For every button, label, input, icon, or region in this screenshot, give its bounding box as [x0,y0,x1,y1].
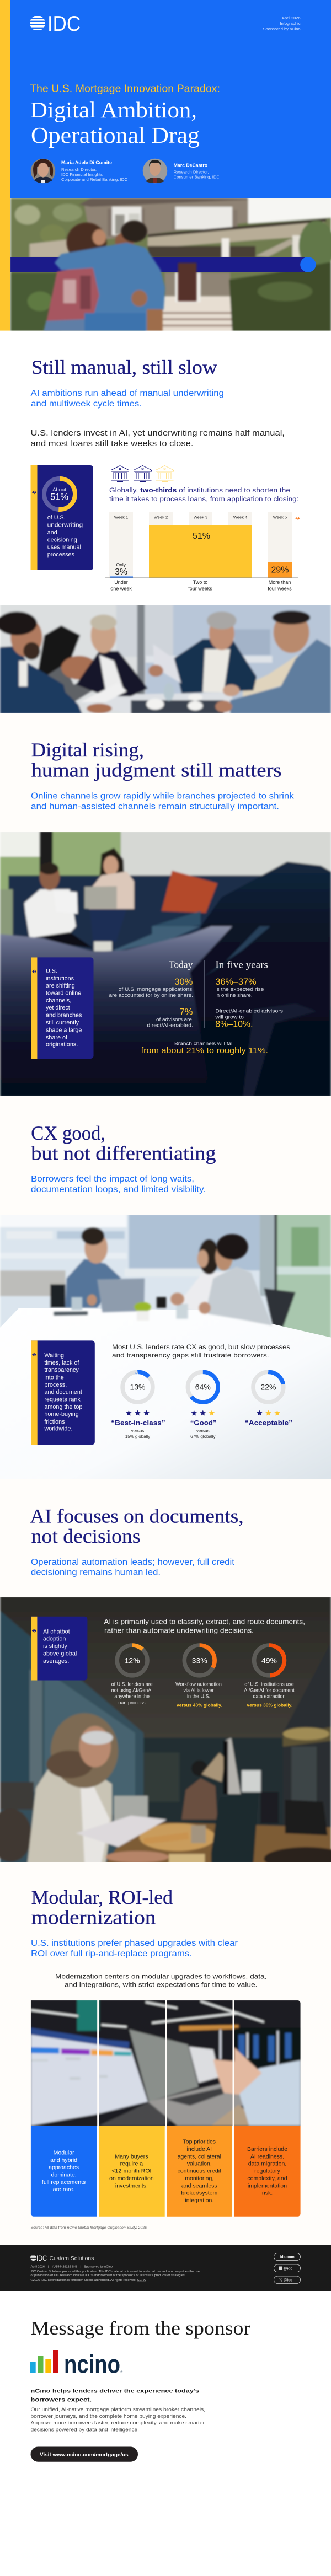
rating: best-in-class: “Best-in-class” [111,1419,166,1427]
legal text: Sponsored by nCino [84,2265,113,2268]
callout text: still currently [46,1019,79,1026]
intro text: and integrations, with strict expectations for time to value. [65,1981,257,1989]
AI use panel [104,1618,305,1708]
card: top priorities: agents, collateral [178,2154,221,2160]
chart: time to close: one week [110,586,132,592]
callout text: and branches [46,1012,82,1018]
icon: arrow [32,491,36,494]
subheading [31,1939,238,1958]
subheading: decisioning remains human led. [31,1568,161,1577]
section: still manual, still slow [31,356,299,592]
callout text: transparency [44,1367,79,1373]
legal text: ©2026 IDC. Reproduction is forbidden unless authorized. All rights reserved. CCPA [31,2278,146,2282]
card: top priorities: integration. [185,2197,213,2204]
column: in five years: Direct/AI-enabled advisors [215,1008,284,1013]
card: barriers: data migration, [248,2161,286,2167]
chart: time to close: Only [116,562,126,567]
card: ROI requirement: require a [120,2161,143,2167]
branch channels note: Branch channels will fall [174,1040,234,1046]
sponsor paragraph: decisions powered by data and intelligence. [31,2427,139,2433]
title: Digital Ambition, [30,97,197,122]
author: Marc DeCastro: Consumer Banking, IDC [174,175,220,180]
rating: acceptable: 22% [260,1383,276,1392]
intro text: AI is primarily used to classify, extract, and route documents, [104,1618,305,1625]
stat: 12%: of U.S. lenders are [111,1682,153,1687]
rating: best-in-class: 15% globally [125,1434,150,1439]
chart: time to close: Week 4 [233,515,247,520]
card: barriers: complexity, and [247,2175,287,2182]
stat: 49% [244,1645,295,1708]
callout text: decisioning [47,537,77,544]
chart: time to close: Under [114,579,128,585]
intro text: Most U.S. lenders rate CX as good, but slow processes [112,1343,290,1351]
stat: 33%: Workflow automation [175,1682,222,1687]
heading: Still manual, still slow [31,356,217,378]
card: barriers: implementation [248,2182,287,2189]
legal text [31,2265,200,2282]
column: in five years [215,959,284,1029]
stat: 33%: via AI is lower [183,1688,214,1693]
callout: waiting times [31,1340,95,1445]
chart intro: Globally, two-thirds of institutions need to shorten the [109,486,290,494]
band end dot [300,257,316,272]
donut: about 51%: 51% [50,492,68,502]
card: barriers: AI readiness, [250,2154,284,2160]
heading [30,1505,244,1547]
chart: time to close: Week 3 [194,515,207,520]
donut: about 51%: About [52,487,66,493]
card: ROI requirement: investments. [115,2182,148,2189]
author: Maria Adele Di Comite: IDC Financial Insights [61,172,103,177]
callout text: underwriting [47,522,83,529]
heading: human judgment still matters [31,759,281,781]
section heading: digital rising [31,739,294,812]
legal text: or publication of IDC research indicate IDC's endorsement of the sponsor's or licensee's products or strategies. [31,2274,185,2277]
subheading: AI ambitions run ahead of manual underwriting [31,389,224,398]
card: barriers: risk. [262,2189,273,2196]
stat: 12% [111,1645,153,1705]
rating: acceptable [245,1372,292,1427]
column: in five years: In five years [215,959,268,970]
column: today: Today [169,959,193,970]
sponsor paragraph [31,2407,205,2433]
intro text: and most loans still take weeks to close. [31,439,193,448]
intro text: and transparency gaps still frustrate borrowers. [112,1351,269,1359]
column: in five years: is the expected rise [215,986,264,992]
chart: time to close: More than [269,579,291,585]
callout text [44,1352,82,1432]
section heading: AI focuses on documents [30,1505,244,1577]
photo: meeting [0,604,331,714]
subheading [31,1558,235,1577]
subheading [31,389,224,409]
callout text: and [47,529,57,536]
intro text: rather than automate underwriting decisions. [104,1627,254,1634]
photo: woman working at night [0,1596,331,1871]
card: barriers [234,2126,301,2217]
stat: 49%: AI/GenAI for document [244,1688,295,1693]
callout: chatbot adoption [31,1617,87,1681]
card: barriers: regulatory [254,2168,281,2175]
column: today: are accounted for by online share. [109,992,193,998]
callout text: U.S. [46,968,57,974]
heading: modernization [31,1906,156,1928]
card: top priorities: and seamless [181,2182,217,2189]
link: X: 𝕏 @idc [279,2278,292,2283]
card: top priorities: continuous credit [178,2168,221,2175]
photo: laptops in data center [30,1999,302,2130]
intro text: U.S. lenders invest in AI, yet underwriting remains half manual, [31,428,285,438]
rating: good: 64% [195,1383,211,1392]
button: visit nCino: Visit www.ncino.com/mortgage/us [40,2452,129,2457]
sponsor headline: borrowers expect. [31,2396,92,2403]
legal text: #US54426126-SIG [52,2265,77,2268]
panel: footer [0,2245,331,2291]
callout text: worldwide. [44,1426,72,1432]
card: top priorities: broker/system [181,2189,218,2196]
rating: best-in-class [111,1372,166,1439]
card: modular approaches [31,2126,97,2217]
card: ROI requirement: Many buyers [115,2154,148,2160]
chart: time to close: 51% [193,532,210,541]
callout: 51% manual [31,465,93,570]
rating: good: 67% globally [190,1434,215,1439]
legal text: IDC Custom Solutions produced this publication. This IDC material is licensed for external use and in no way does the use [31,2270,200,2273]
subheading: and human-assisted channels remain structurally important. [31,802,279,812]
stat: 33%: versus 43% globally. [177,1703,222,1708]
nCino logo: ® [120,2370,122,2374]
navy band [10,257,308,272]
title: Operational Drag [31,122,200,148]
subheading: Borrowers feel the impact of long waits, [31,1174,194,1184]
heading: not decisions [31,1525,141,1547]
author: Maria Adele Di Comite: Research Director, [61,167,97,172]
panel: modernization cards [31,2126,301,2217]
callout text: and document [44,1389,82,1396]
callout text: are shifting [46,983,75,989]
sponsor headline [31,2388,199,2403]
column: today: direct/AI-enabled. [147,1022,193,1028]
heading [31,1122,216,1164]
subheading: and multiweek cycle times. [31,399,142,409]
IDC Custom Solutions logo: IDC [36,2253,47,2262]
CX ratings panel [111,1343,292,1439]
icons: banks [111,465,173,482]
sponsor paragraph: Approve more borrowers faster, reduce complexity, and make smarter [31,2420,205,2425]
source note: Source: All data from nCino Global Mortgage Origination Study, 2026 [31,2226,147,2230]
title [30,97,200,148]
intro text: Modernization centers on modular upgrades to workflows, data, [55,1973,266,1981]
heading: but not differentiating [31,1142,216,1164]
heading [31,739,281,781]
card: top priorities [167,2126,232,2217]
intro text [104,1618,305,1634]
rating: best-in-class: versus [131,1428,144,1434]
photo: borrowers meeting lender [0,1214,331,1480]
subheading: documentation loops, and limited visibility. [31,1185,206,1194]
chart: time to close [105,512,299,592]
card: modular approaches: full replacements [42,2179,86,2186]
link: idc.com: idc.com [280,2255,295,2260]
stat: 49%: data extraction [253,1694,286,1699]
stat: 33%: 33% [192,1656,207,1665]
link: LinkedIn: @idc [284,2267,293,2271]
sponsor paragraph: borrower journeys, and the complete home buying experience. [31,2413,186,2419]
chart: time to close: Week 2 [154,515,168,520]
IDC Custom Solutions logo: Custom Solutions [50,2256,94,2262]
stat: 12%: loan process. [117,1700,147,1705]
link: idc.com [274,2253,300,2261]
chart: time to close: Week 1 [114,515,128,520]
IDC Custom Solutions logo [30,2255,94,2261]
callout text: times, lack of [44,1360,79,1366]
callout text [47,514,83,558]
intro text [31,428,285,448]
callout text: processes [47,551,75,558]
heading [31,1886,173,1928]
sponsor paragraph: Our unified, AI-native mortgage platform streamlines broker channels, [31,2407,205,2412]
author: Maria Adele Di Comite: Corporate and Retail Banking, IDC [61,177,128,182]
publication info: Infographic [280,21,301,26]
author: Marc DeCastro: Research Director, [174,170,209,175]
section: modular, ROI-led modernization [31,1886,266,1989]
stat: 49%: of U.S. institutions use [244,1682,294,1687]
column: in five years: 8%–10%. [215,1019,253,1029]
intro text [55,1973,266,1989]
rating: good: versus [196,1428,210,1434]
sponsor headline: nCino helps lenders deliver the experience today’s [31,2388,199,2395]
author: Marc DeCastro: Marc DeCastro [174,163,207,168]
callout text [43,1629,77,1665]
card: modular approaches: and hybrid [50,2157,77,2164]
column: in five years: 36%–37% [215,977,257,987]
card: top priorities: Top priorities [183,2138,216,2145]
publication info: April 2026 [282,15,301,20]
icon: arrow [32,970,36,973]
subheading [31,1174,206,1194]
stat: 33% [175,1645,222,1708]
chart intro [109,486,299,503]
heading: CX good, [31,1122,105,1144]
callout: online shift [31,957,94,1059]
column: today [109,959,193,1028]
callout text: into the [44,1374,64,1381]
stat: 33%: in the U.S. [187,1694,210,1699]
callout text: requests rank [44,1396,81,1403]
column: in five years: in online share. [215,992,253,998]
photo: couple on sofa, dark [0,831,331,1097]
stat: 12%: 12% [125,1656,140,1665]
rating: acceptable: “Acceptable” [245,1419,292,1427]
card: modular approaches: Modular [54,2149,74,2156]
column: today: of advisors are [156,1017,192,1022]
chart: time to close: 3% [115,567,127,577]
button: visit nCino [31,2447,138,2462]
heading: AI focuses on documents, [30,1505,244,1527]
card: top priorities: include AI [187,2146,212,2153]
publication info: Sponsored by nCino [263,26,301,31]
author: Marc DeCastro [143,159,220,183]
card: ROI requirement: on modernization [109,2175,154,2182]
branch channels note [141,1040,268,1055]
IDC logo: IDC [47,12,81,36]
card: ROI requirement: <12-month ROI [111,2168,151,2175]
callout text: originations. [46,1041,78,1048]
column: in five years: will grow to [215,1015,244,1020]
card: modular approaches: approaches [49,2164,79,2171]
link: X [274,2276,300,2284]
section heading: CX good [31,1122,216,1194]
subheading: U.S. institutions prefer phased upgrades with clear [31,1939,238,1948]
chart: time to close: Week 5 [273,515,287,520]
callout text: among the top [44,1404,82,1410]
callout text: is slightly [43,1643,67,1650]
subheading: Online channels grow rapidly while branches projected to shrink [31,792,294,801]
chart: time to close: four weeks [188,586,212,592]
icon: arrow [32,1629,36,1632]
callout text: shape a large [46,1027,82,1033]
callout text: above global [43,1651,77,1657]
branch channels note: from about 21% to roughly 11%. [141,1046,268,1055]
callout text: yet direct [46,1005,70,1011]
chart: time to close: four weeks [268,586,292,592]
rating: good: “Good” [190,1419,217,1427]
legal text: April 2026 [31,2265,45,2268]
callout text: frictions [44,1419,65,1425]
callout text: Waiting [44,1352,64,1359]
heading: Message from the sponsor [31,2318,251,2339]
callout text: uses manual [47,544,81,551]
subheading: Operational automation leads; however, full credit [31,1558,235,1567]
heading: Digital rising, [31,739,144,761]
card: barriers: Barriers include [247,2146,287,2153]
icon: orange arrow [296,517,299,520]
icon: arrow [32,1353,36,1356]
link: LinkedIn [274,2264,300,2272]
donut: about 51% [44,479,75,509]
stat: 12%: not using AI/GenAI [111,1688,153,1693]
callout text: share of [46,1034,68,1041]
callout text: institutions [46,975,74,982]
intro text [112,1343,290,1359]
panel: header [0,0,331,331]
callout text: channels, [46,997,71,1004]
callout text: home-buying [44,1411,79,1418]
chart: time to close: Two to [193,579,207,585]
chart intro: time it takes to process loans, from application to closing: [109,495,299,503]
chart: time to close: 29% [271,566,289,575]
callout text: of U.S. [47,514,66,521]
door [178,263,196,301]
column: today: 7% [180,1007,193,1017]
subtitle: The U.S. Mortgage Innovation Paradox: [30,83,220,95]
stat: 49%: 49% [261,1656,277,1665]
subheading [31,792,294,812]
heading: Modular, ROI-led [31,1886,173,1908]
card: modular approaches: dominate; [51,2171,77,2178]
panel: hero photo of couple and house [10,198,331,332]
callout text: AI chatbot [43,1629,70,1635]
publication info [263,15,301,31]
stat: 12%: anywhere in the [114,1694,150,1699]
legal text: | [48,2265,49,2268]
nCino logo: ncino [64,2350,120,2379]
column: today: 30% [174,977,193,987]
stat: 49%: versus 39% globally. [247,1703,292,1708]
callout text: adoption [43,1636,66,1643]
author: Maria Adele Di Comite [31,159,128,183]
card: top priorities: valuation, [187,2161,212,2167]
IDC logo [30,16,80,31]
nCino logo [30,2350,123,2379]
subheading: ROI over full rip-and-replace programs. [31,1949,192,1958]
callout text [46,968,82,1048]
callout text: toward online [46,990,81,996]
rating: good [188,1372,218,1439]
card: ROI requirement [99,2126,165,2217]
rating: best-in-class: 13% [130,1383,146,1392]
callout text: process, [44,1382,67,1388]
author: Maria Adele Di Comite: Maria Adele Di Comite [61,160,113,165]
card: modular approaches: are rare. [53,2186,74,2193]
column: today: of U.S. mortgage applications [119,986,193,992]
callout text: averages. [43,1658,69,1665]
section: message from the sponsor [30,2318,251,2462]
card: top priorities: monitoring, [185,2175,213,2182]
comparison: today vs in five years [109,959,284,1055]
